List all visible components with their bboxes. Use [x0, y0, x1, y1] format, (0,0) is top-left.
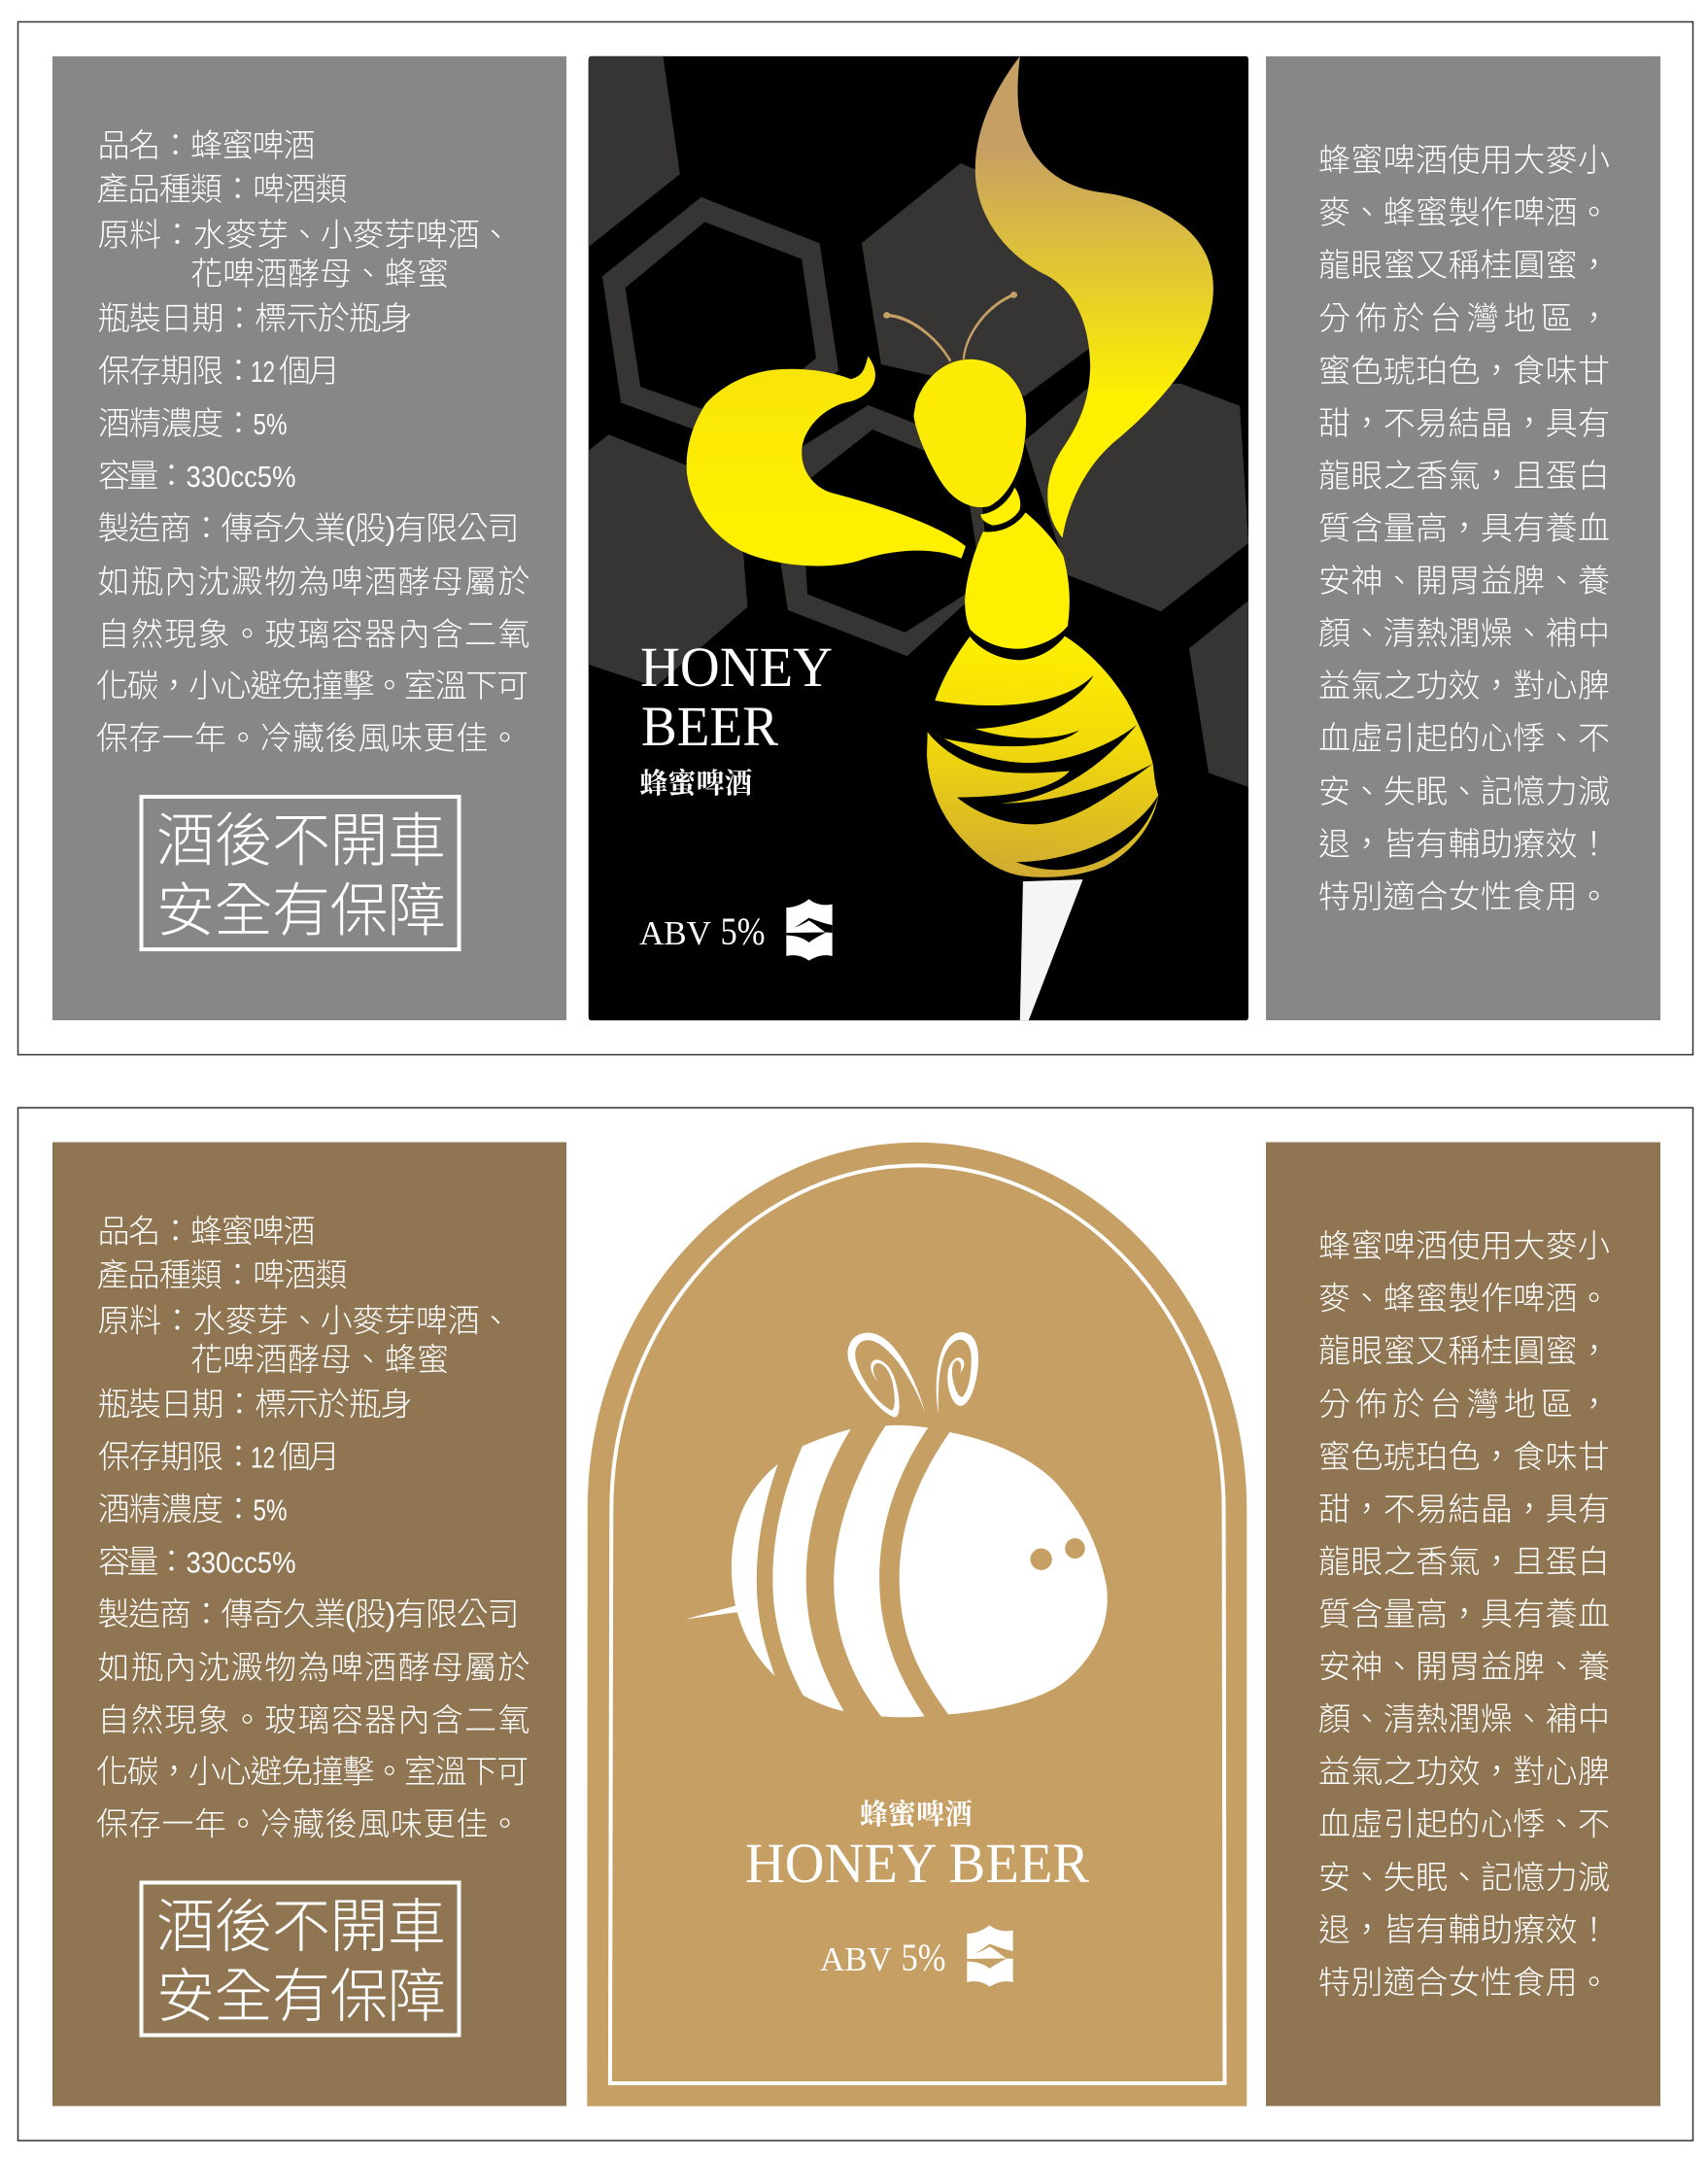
text block: product details: 12	[251, 355, 275, 389]
text block: product details: 產品種類：啤酒類	[97, 171, 348, 207]
text block: product details: 酒精濃度：	[98, 1491, 255, 1527]
bee tail and stinger	[685, 1464, 778, 1676]
text block: product details: 原料：水麥芽、小麥芽啤酒、	[97, 1302, 511, 1339]
ABV value	[639, 909, 766, 953]
stinger	[1020, 879, 1083, 1020]
panel: bottom right description	[1266, 1143, 1660, 2107]
text block: product details: 容量：	[98, 1543, 188, 1580]
text block: honey description: 安、失眠、記憶力減	[1318, 773, 1610, 809]
panel: black label with wasp	[589, 56, 1248, 1020]
text block: honey description	[1318, 142, 1610, 914]
text block: product details: 自然現象。玻璃容器內含二氧	[97, 1702, 530, 1737]
text block: honey description: 血虛引起的心悸、不	[1318, 720, 1610, 756]
text block: product details: 個月	[279, 353, 340, 389]
text block: honey description: 龍眼蜜又稱桂圓蜜，	[1318, 247, 1610, 283]
text block: honey description: 退，皆有輔助療效！	[1318, 826, 1610, 862]
text block: product details: 製造商：傳奇久業(股)有限公司	[97, 1595, 519, 1632]
ABV value	[820, 1936, 946, 1979]
bee illustration	[685, 1425, 1108, 1717]
text block: product details: 品名：蜂蜜啤酒	[97, 1213, 315, 1250]
text block: product details: 自然現象。玻璃容器內含二氧	[97, 616, 530, 652]
text block: honey description: 分佈於台灣地區，	[1318, 1386, 1610, 1423]
bee stripes	[772, 1425, 928, 1717]
text block: honey description: 安神、開胃益脾、養	[1318, 563, 1610, 599]
text block: honey description: 蜜色琥珀色，食味甘	[1318, 1438, 1610, 1475]
warning box: do not drink and drive: 酒後不開車	[156, 808, 446, 874]
right wing	[975, 56, 1213, 538]
text block: product details: 花啤酒酵母、蜂蜜	[190, 1341, 449, 1378]
text block: honey description: 安、失眠、記憶力減	[1318, 1860, 1610, 1895]
text block: honey description: 分佈於台灣地區，	[1318, 300, 1610, 336]
text block: product details: 化碳，小心避免撞擊。室溫下可	[96, 668, 529, 703]
text block: honey description: 質含量高，具有養血	[1318, 510, 1610, 546]
text block: product details	[96, 127, 530, 756]
antennae	[883, 291, 1017, 361]
text block: honey description	[1318, 1228, 1610, 2000]
bee head	[900, 1432, 1108, 1714]
text block: product details: 瓶裝日期：標示於瓶身	[97, 300, 412, 336]
text block: honey description: 龍眼之香氣，且蛋白	[1318, 1543, 1610, 1580]
heading: HONEY BEER	[640, 635, 833, 758]
icon: brand logo	[967, 1925, 1013, 1987]
panel: gold arch label with bee	[587, 1143, 1247, 2107]
text block: product details: 5%	[253, 1492, 288, 1527]
text block: honey description: 顏、清熱潤燥、補中	[1318, 615, 1610, 651]
subtitle: Chinese product name: 蜂蜜啤酒	[639, 767, 752, 800]
neck collar	[980, 488, 1020, 526]
ABV value: 5%	[902, 1936, 946, 1979]
text block: honey description: 特別適合女性食用。	[1318, 1965, 1610, 2000]
ABV value: 5%	[721, 909, 766, 953]
text block: honey description: 龍眼之香氣，且蛋白	[1318, 458, 1610, 494]
bee eyes	[1031, 1538, 1085, 1570]
heading: HONEY BEER: BEER	[641, 695, 778, 758]
text block: honey description: 益氣之功效，對心脾	[1318, 668, 1610, 703]
text block: honey description: 益氣之功效，對心脾	[1318, 1753, 1610, 1790]
warning box: do not drink and drive	[142, 797, 459, 949]
text block: honey description: 甜，不易結晶，具有	[1318, 405, 1610, 441]
text block: honey description: 甜，不易結晶，具有	[1318, 1491, 1610, 1527]
text block: honey description: 安神、開胃益脾、養	[1318, 1648, 1610, 1685]
ABV value: ABV	[639, 914, 711, 952]
text block: product details: 保存期限：	[98, 353, 255, 389]
heading: HONEY BEER: HONEY	[640, 635, 833, 699]
text block: product details: 品名：蜂蜜啤酒	[97, 127, 315, 163]
text block: honey description: 蜂蜜啤酒使用大麥小	[1318, 142, 1610, 178]
bee antennae	[847, 1332, 978, 1418]
text block: honey description: 麥、蜂蜜製作啤酒。	[1318, 194, 1610, 230]
text block: product details: 製造商：傳奇久業(股)有限公司	[97, 510, 519, 546]
text block: product details: 12	[251, 1440, 275, 1475]
text block: honey description: 蜜色琥珀色，食味甘	[1318, 353, 1610, 389]
text block: product details: 如瓶內沈澱物為啤酒酵母屬於	[97, 1650, 530, 1685]
text block: product details: 容量：	[98, 458, 188, 494]
text block: product details: 保存一年。冷藏後風味更佳。	[96, 720, 521, 756]
left wing	[687, 356, 966, 566]
thorax	[965, 512, 1070, 649]
warning box: do not drink and drive: 安全有保障	[156, 1965, 446, 2029]
warning box: do not drink and drive: 安全有保障	[156, 878, 446, 943]
heading: HONEY BEER: HONEY BEER	[745, 1832, 1089, 1895]
ABV value: ABV	[820, 1940, 892, 1978]
panel: bottom left product info	[52, 1143, 566, 2107]
text block: product details: 瓶裝日期：標示於瓶身	[97, 1386, 412, 1423]
text block: honey description: 特別適合女性食用。	[1318, 878, 1610, 914]
text block: product details: 保存一年。冷藏後風味更佳。	[96, 1805, 521, 1842]
text block: honey description: 退，皆有輔助療效！	[1318, 1912, 1610, 1947]
text block: product details: 花啤酒酵母、蜂蜜	[190, 256, 449, 291]
icon: brand logo	[786, 899, 833, 961]
honeycomb background	[589, 56, 1248, 787]
warning box: do not drink and drive: 酒後不開車	[156, 1895, 446, 1959]
text block: honey description: 顏、清熱潤燥、補中	[1318, 1700, 1610, 1737]
text block: product details: 保存期限：	[98, 1438, 255, 1475]
abdomen with stripes	[923, 636, 1158, 877]
text block: honey description: 麥、蜂蜜製作啤酒。	[1318, 1281, 1610, 1316]
text block: product details	[96, 1213, 530, 1842]
text block: product details: 個月	[279, 1438, 340, 1475]
text block: product details: 330cc5%	[187, 460, 295, 494]
text block: honey description: 蜂蜜啤酒使用大麥小	[1318, 1228, 1610, 1263]
text block: honey description: 血虛引起的心悸、不	[1318, 1805, 1610, 1842]
label frame: bottom	[17, 1108, 1692, 2141]
panel: top right description	[1266, 56, 1660, 1020]
text block: product details: 酒精濃度：	[98, 405, 255, 441]
text block: product details: 化碳，小心避免撞擊。室溫下可	[96, 1753, 529, 1790]
warning box: do not drink and drive	[142, 1883, 459, 2035]
subtitle: Chinese product name: 蜂蜜啤酒	[860, 1798, 973, 1831]
text block: honey description: 質含量高，具有養血	[1318, 1595, 1610, 1632]
text block: product details: 原料：水麥芽、小麥芽啤酒、	[97, 217, 511, 253]
text block: product details: 如瓶內沈澱物為啤酒酵母屬於	[97, 564, 530, 600]
text block: product details: 5%	[253, 407, 288, 441]
text block: product details: 330cc5%	[187, 1545, 295, 1580]
label frame: top	[17, 21, 1692, 1055]
panel: top left product info	[52, 56, 566, 1020]
text block: product details: 產品種類：啤酒類	[97, 1257, 348, 1292]
text block: honey description: 龍眼蜜又稱桂圓蜜，	[1318, 1333, 1610, 1368]
head	[913, 360, 1026, 507]
